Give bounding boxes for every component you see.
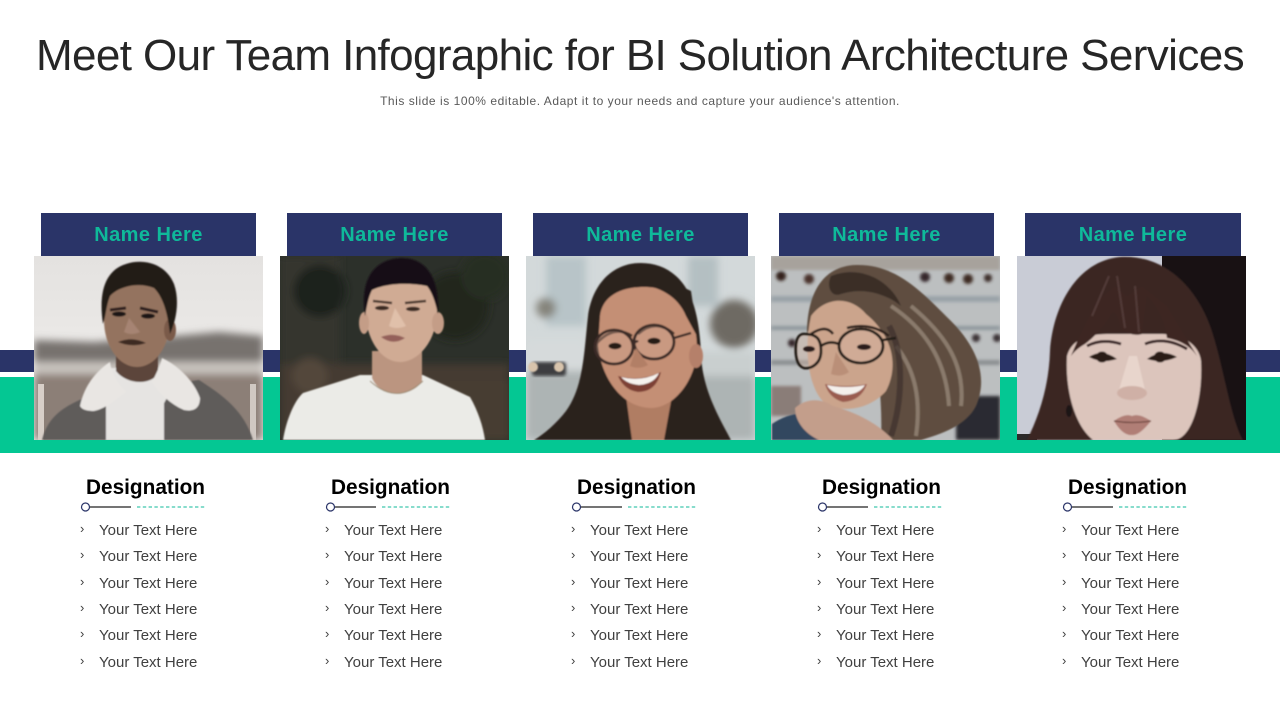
list item: › (571, 653, 575, 668)
list item: › (325, 547, 329, 562)
photo 3: smiling woman with glasses on a street (526, 256, 755, 440)
list item: › (1062, 547, 1066, 562)
list item (1062, 652, 1262, 672)
divider 2 (326, 502, 450, 512)
list item: › (571, 574, 575, 589)
list item: › (325, 521, 329, 536)
name bar 5 (1025, 213, 1241, 256)
list item: › (817, 626, 821, 641)
title: Meet Our Team Infographic for BI Solution Architecture Services (36, 31, 1244, 80)
name bar 5: Name Here (1079, 224, 1187, 246)
list item: Your Text Here (344, 575, 442, 592)
list item: › (325, 653, 329, 668)
list item: Your Text Here (1081, 522, 1179, 539)
list item (1062, 573, 1262, 593)
list item: › (80, 653, 84, 668)
list item: › (817, 521, 821, 536)
list item: › (571, 600, 575, 615)
list item (1062, 546, 1262, 566)
divider 4 (818, 502, 942, 512)
list item: Your Text Here (99, 627, 197, 644)
list item: Your Text Here (590, 522, 688, 539)
divider 5 (1062, 502, 1186, 512)
list item: Your Text Here (344, 522, 442, 539)
photo 5: woman with dark fringe, close-up (1017, 256, 1246, 440)
designation heading 1: Designation (86, 476, 205, 499)
name bar 3 (533, 213, 748, 256)
list item: Your Text Here (836, 627, 934, 644)
list item: › (1062, 574, 1066, 589)
list item: Your Text Here (836, 548, 934, 565)
list item: › (817, 600, 821, 615)
list item: Your Text Here (1081, 575, 1179, 592)
list item: › (325, 600, 329, 615)
list item: › (817, 547, 821, 562)
list item: Your Text Here (1081, 627, 1179, 644)
designation heading 3: Designation (577, 476, 696, 499)
name bar 3: Name Here (586, 224, 695, 246)
list item: › (571, 547, 575, 562)
column 3: designation and list (571, 476, 696, 671)
list item: › (817, 653, 821, 668)
list item: › (1062, 521, 1066, 536)
list item: › (571, 626, 575, 641)
list item: Your Text Here (344, 627, 442, 644)
name bar 1 (41, 213, 256, 256)
name bar 2: Name Here (340, 224, 449, 246)
list item: Your Text Here (836, 654, 934, 671)
name bar 1: Name Here (94, 224, 203, 246)
list item: › (1062, 626, 1066, 641)
list item: Your Text Here (344, 601, 442, 618)
list item: › (80, 626, 84, 641)
list item: Your Text Here (99, 575, 197, 592)
list item: Your Text Here (590, 548, 688, 565)
list item: Your Text Here (344, 654, 442, 671)
photo 1: young man in shearling jacket (34, 256, 263, 440)
list item: Your Text Here (836, 601, 934, 618)
column 5: designation and list (1062, 476, 1187, 671)
list item: Your Text Here (99, 548, 197, 565)
photo 4: smiling woman with wavy hair and glasses (771, 256, 1000, 440)
list item: › (325, 574, 329, 589)
name bar 2 (287, 213, 502, 256)
divider 3 (572, 502, 696, 512)
list item: Your Text Here (590, 601, 688, 618)
list item: Your Text Here (99, 654, 197, 671)
list item: Your Text Here (590, 627, 688, 644)
navy band (0, 350, 1280, 372)
list item: Your Text Here (590, 575, 688, 592)
list item: › (80, 574, 84, 589)
designation heading 4: Designation (822, 476, 941, 499)
green band (0, 377, 1280, 453)
list item: › (80, 547, 84, 562)
list item: Your Text Here (99, 522, 197, 539)
list item: Your Text Here (836, 575, 934, 592)
column 2: designation and list (325, 476, 450, 671)
list item: › (1062, 600, 1066, 615)
divider 1 (80, 502, 204, 512)
designation heading 2: Designation (331, 476, 450, 499)
list item: › (817, 574, 821, 589)
list item: › (80, 600, 84, 615)
list item: Your Text Here (836, 522, 934, 539)
list item: › (325, 626, 329, 641)
list item: Your Text Here (344, 548, 442, 565)
list item (1062, 599, 1262, 619)
list item: › (1062, 653, 1066, 668)
list item: Your Text Here (99, 601, 197, 618)
name bar 4: Name Here (832, 224, 941, 246)
list item: › (80, 521, 84, 536)
subtitle: This slide is 100% editable. Adapt it to your needs and capture your audience's attention. (380, 94, 900, 108)
list item: Your Text Here (1081, 654, 1179, 671)
column 1: designation and list (80, 476, 205, 671)
column 4: designation and list (817, 476, 942, 671)
list item: Your Text Here (1081, 548, 1179, 565)
name bar 4 (779, 213, 994, 256)
list item (1062, 625, 1262, 645)
list item: › (571, 521, 575, 536)
designation heading 5: Designation (1068, 476, 1187, 499)
photo 2: young man in white t-shirt (280, 256, 509, 440)
list item: Your Text Here (1081, 601, 1179, 618)
list item: Your Text Here (590, 654, 688, 671)
